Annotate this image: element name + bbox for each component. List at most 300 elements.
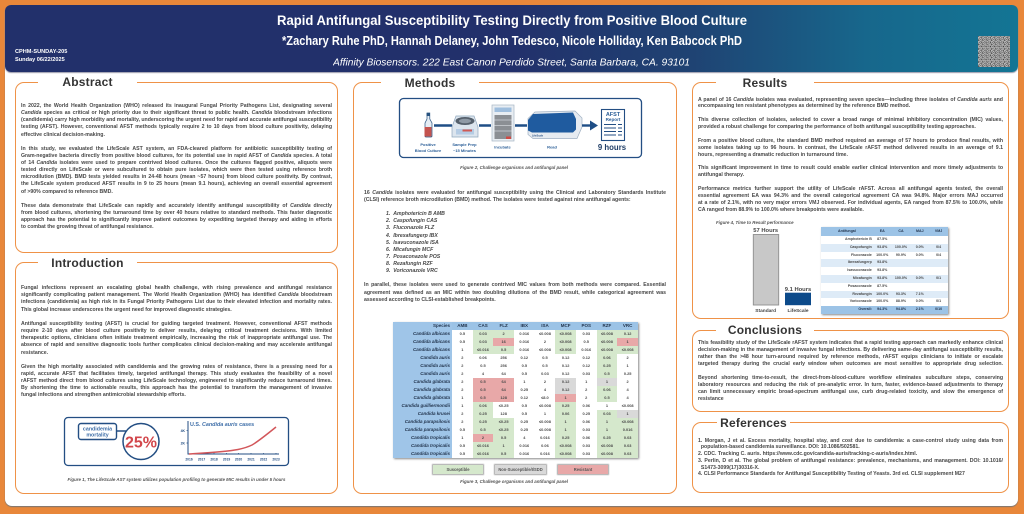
table: MIC results by species: 4 [482, 371, 484, 376]
table: performance by antifungal: Isavuconazole [847, 268, 872, 272]
legend: resistant: Resistant [574, 467, 592, 472]
line chart: U.S. Candida auris cases: 2018 [210, 458, 218, 462]
list: antifungal agents [386, 211, 445, 274]
poster id and date: Sunday 06/22/2025 [15, 57, 65, 63]
table: performance by antifungal: 0.0% [916, 276, 924, 280]
table: MIC results by species: 0.06 [603, 355, 611, 360]
icon: blood culture bottle [424, 113, 432, 137]
table: MIC results by species: ≤0.008 [601, 331, 613, 336]
text: methods intro [364, 190, 666, 203]
table: MIC results by species: Candida auris [420, 371, 450, 376]
table: MIC results by species: 0.25 [603, 435, 611, 440]
table: MIC results by species: Candida glabrata [413, 387, 450, 392]
table: MIC results by species: ≤0.008 [560, 451, 572, 456]
text: results body: Performance metrics further support the utility of LifeScale rAFST. Across all antifungal agents tested, the overall [698, 186, 1003, 192]
legend: non-susceptible [495, 465, 546, 474]
table: MIC results by species: 0.03 [479, 339, 487, 344]
table: performance by antifungal: Antifungal [838, 229, 856, 233]
text: conclusions body: targeted therapy during the crucial early window when outcomes are most sensitive to appropriate drug selection. [698, 361, 1003, 367]
heading: methods [381, 76, 479, 90]
icon: LifeScale reader [528, 111, 582, 138]
table: performance by antifungal [821, 227, 948, 314]
table: MIC results by species: 2 [461, 363, 463, 368]
table: MIC results by species: ≤0.25 [499, 427, 508, 432]
table: MIC results by species: 0.25 [520, 387, 528, 392]
table: MIC results by species: 0.5 [522, 371, 527, 376]
heading: methods: Methods [405, 76, 455, 90]
table: MIC results by species: 0.016 [519, 331, 529, 336]
panel: methods [353, 82, 677, 494]
table: MIC results by species: 0.12 [562, 379, 569, 384]
text: conclusions body [698, 340, 1003, 402]
table: MIC results by species: 0.5 [460, 443, 465, 448]
table: MIC results by species: 1 [606, 379, 608, 384]
table: MIC results by species: MCF [561, 323, 570, 328]
text: methods parallel testing: In parallel, these isolates were used to generate contrived MIC values from both methods were compared. Essential [364, 282, 666, 288]
table: MIC results by species: 128 [500, 395, 507, 400]
text: introduction body [21, 285, 332, 398]
text: abstract body: These data demonstrate that LifeScale can rapidly and accurately identify antifungal susceptibility of Candida directly [21, 203, 332, 209]
table: MIC results by species: ≤0.008 [539, 419, 551, 424]
table: MIC results by species: 2 [461, 355, 463, 360]
bar: standard 57 hours: Standard [755, 308, 776, 314]
workflow labels: ~15 Minutes [453, 148, 477, 153]
table: MIC results by species: VRC [623, 323, 632, 328]
table: performance by antifungal: Posaconazole [848, 284, 872, 288]
table: MIC results by species: 0.12 [562, 355, 569, 360]
table: MIC results by species: 0.016 [581, 347, 591, 352]
line chart: U.S. Candida auris cases: 2019 [223, 458, 230, 462]
table: MIC results by species: ≤0.008 [601, 339, 613, 344]
text: introduction body: rapid, accurate AFST that facilitates timely, targeted antifungal therapy. This study evaluates the feasibility of a novel [21, 371, 332, 377]
icon: centrifuge [452, 116, 478, 137]
table: MIC results by species: 0.03 [624, 443, 631, 448]
table: MIC results by species: 1 [606, 427, 608, 432]
table: MIC results by species: 0.25 [582, 411, 590, 416]
text: abstract body: effective clinical decision-making. [21, 132, 105, 138]
table: performance by antifungal: 0/4 [936, 245, 941, 249]
table: MIC results by species: ≤0.008 [622, 347, 634, 352]
table: performance by antifungal: Micafungin [853, 276, 872, 280]
table: MIC results by species: 0.12 [562, 387, 569, 392]
table: MIC results by species: 0.06 [562, 411, 569, 416]
table: MIC results by species: 0.25 [562, 403, 569, 408]
line chart: U.S. Candida auris cases: 2016 [185, 458, 193, 462]
text: introduction body: This global increase underscores the urgent need for improved diagnostic strategies. [21, 307, 232, 313]
table: MIC results by species: ≤8.0 [541, 395, 549, 400]
callout: candidemia mortality: candidemia [83, 426, 112, 432]
line chart: U.S. Candida auris cases: 2K [181, 441, 186, 445]
table: MIC results by species: ≤0.008 [560, 347, 572, 352]
table: MIC results by species: 0.25 [520, 427, 528, 432]
caption: figure 1: Figure 1, The LifeScale AST system utilizes population profiling to generate MIC results in under 5 hours [68, 477, 285, 482]
table: MIC results by species: 0.06 [582, 419, 590, 424]
text: introduction body: require 2-10 days after blood culture positivity to deliver results, delaying critical treatment decisions. With limited [21, 328, 332, 334]
table: MIC results by species: 0.016 [519, 339, 529, 344]
table: MIC results by species: 0.03 [624, 451, 631, 456]
table: performance by antifungal: Caspofungin [850, 245, 872, 249]
list: antifungal agents: 8. Rezafungin RZF [386, 261, 433, 267]
text: introduction body: Fungal infections represent an escalating global health challenge, with rising prevalence and antifungal resistance [21, 285, 332, 291]
table: MIC results by species: 0.5 [460, 427, 465, 432]
bar: standard 57 hours: 57 Hours [753, 228, 778, 234]
line chart: U.S. Candida auris cases: 2021 [247, 458, 255, 462]
line chart: U.S. Candida auris cases: 2017 [198, 458, 205, 462]
table: MIC results by species: 64 [501, 379, 506, 384]
table: MIC results by species: 1 [627, 339, 629, 344]
table: performance by antifungal: 93.3% [896, 292, 906, 296]
table: performance by antifungal: 0.0% [916, 253, 924, 257]
text: abstract body: testing (AFST). However, conventional AFST methods typically require 2 to 10 days from blood culture positivity, delaying [21, 124, 332, 130]
figure 2: workflow diagram [398, 98, 642, 158]
table: MIC results by species: IBX [521, 323, 528, 328]
table: MIC results by species: 128 [500, 411, 507, 416]
heading: abstract [38, 75, 137, 89]
table: MIC results by species: 0.016 [519, 451, 529, 456]
table: MIC results by species: 1 [503, 443, 505, 448]
table: MIC results by species: ≤0.25 [499, 419, 508, 424]
workflow connectors [434, 124, 527, 127]
table: MIC results by species: 0.5 [522, 411, 527, 416]
table: MIC results by species: 0.03 [582, 443, 590, 448]
text: results body: at a rate of 2.1%, with no very major errors VMJ observed. For individual agents, EA ranged from 87.5% to 100.0%, while [698, 200, 1003, 206]
table: performance by antifungal: Ibrexafungerp [848, 260, 872, 264]
panel: references [692, 422, 1009, 493]
text: results body: antifungal therapy. [698, 172, 744, 178]
table: performance by antifungal: 0/4 [936, 253, 941, 257]
table: MIC results by species: Candida albicans [413, 347, 450, 352]
table: MIC results by species: 1 [565, 427, 567, 432]
list: antifungal agents: 3. Fluconazole FLZ [386, 225, 434, 231]
table: MIC results by species: 0.5 [460, 339, 465, 344]
icon: AFST report: AFST [606, 112, 621, 118]
table: MIC results by species: 0.03 [582, 427, 590, 432]
table: MIC results by species: Candida tropicalis [411, 435, 450, 440]
table: MIC results by species: 1 [565, 395, 567, 400]
table: MIC results by species: POS [582, 323, 591, 328]
table: MIC results by species: 0.25 [603, 363, 611, 368]
table: MIC results by species: 16 [501, 339, 506, 344]
table: MIC results by species: 0.25 [520, 419, 528, 424]
bar chart: time to result [752, 228, 811, 314]
table: MIC results by species: 1 [461, 403, 463, 408]
icon: LifeScale reader: LifeScale [532, 134, 544, 138]
text: results body: hours, representing a dramatic reduction in turnaround time. [698, 152, 848, 158]
line chart: U.S. Candida auris cases [181, 421, 280, 462]
heading: abstract: Abstract [62, 75, 113, 89]
text: results body: From a positive blood culture, the standard BMD method required an average of 57 hours to produce final results, with [698, 138, 1003, 144]
line chart: U.S. Candida auris cases: 2023 [272, 458, 280, 462]
bar: lifescale 9.1 hours: LifeScale [787, 308, 809, 314]
table: MIC results by species: 2 [461, 419, 463, 424]
table: performance by antifungal: 94.8% [896, 307, 906, 311]
label: 9 hours: 9 hours [598, 143, 627, 152]
icon: 25 percent circle: 25% [125, 434, 157, 452]
table: MIC results by species: Species [433, 323, 450, 328]
table: MIC results by species: 0.5 [604, 371, 610, 376]
text: results body [698, 97, 1003, 213]
table: MIC results by species: Candida glabrata [413, 379, 450, 384]
table: MIC results by species: Candida parapsilosis [405, 427, 450, 432]
affiliation: Affinity Biosensors. 222 East Canon Perdido Street, Santa Barbara, CA. 93101 [333, 56, 690, 68]
table: MIC results by species: FLZ [500, 323, 508, 328]
table: performance by antifungal: 87.5% [877, 237, 887, 241]
heading: references: References [720, 416, 787, 430]
table: MIC results by species: ≤0.008 [539, 427, 551, 432]
table: performance by antifungal: Overall: [858, 307, 872, 311]
table: performance by antifungal: 100.0% [876, 253, 888, 257]
table: MIC results by species: ≤0.008 [560, 331, 572, 336]
text: introduction body: infections (candidemia) as high risk in its Fungal Priority Pathogens List due to their elevated infection and mortality rates. [21, 299, 332, 305]
table: MIC results by species: AMB [457, 323, 467, 328]
text: conclusions body: laboratory resources and reducing the risk of pre-analytic error. In turn, faster, evidence-based adjustments to therapy [698, 382, 1003, 388]
text: references list: 4. CLSI Performance Standards for Antifungal Susceptibility Testing of Yeasts. 3rd ed. CLSI supplement M27 [698, 471, 965, 477]
line chart: U.S. Candida auris cases: U.S. Candida auris cases [190, 422, 254, 428]
text: references list: S1473-3099(17)30316-X. [701, 465, 759, 471]
table: performance by antifungal: 93.8% [877, 276, 887, 280]
text: abstract body: of >90% compared to reference BMD. [21, 189, 113, 195]
text: introduction body: resistance. [21, 350, 48, 356]
table: MIC results by species: ≤0.016 [477, 347, 489, 352]
table: MIC results by species: 2 [503, 331, 505, 336]
text: references list: 2. CDC. Tracking C. auris. https://www.cdc.gov/candida-auris/tracking-c-auris/index.html. [698, 451, 917, 457]
table: MIC results by species: 0.5 [480, 363, 486, 368]
text: results body: encompassing ten resistant phenotypes as determined by the reference BMD method. [698, 103, 910, 109]
text: introduction body: Antifungal susceptibility testing (AFST) is crucial for guiding targeted treatment. However, conventional AFST methods [21, 321, 332, 327]
text: methods parallel testing [364, 282, 666, 303]
table: MIC results by species: 0.12 [562, 371, 569, 376]
text: results body: This significant improvement in time to result could enable earlier clinical intervention and more timely adjustments to [698, 165, 1003, 171]
caption: figure 3: Figure 3, Challenge organisms and antifungal panel [460, 478, 568, 484]
table: MIC results by species: 0.03 [582, 331, 590, 336]
list: antifungal agents: 7. Posaconazole POS [386, 254, 440, 260]
table: performance by antifungal: 93.8% [877, 268, 887, 272]
icon: AFST report: Report [606, 117, 621, 122]
table: MIC results by species: 256 [500, 355, 507, 360]
table: MIC results by species: 0.03 [582, 371, 590, 376]
table: MIC results by species: 0.5 [480, 387, 486, 392]
text: methods intro: 16 Candida isolates were evaluated for antifungal susceptibility using the Clinical and Laboratory Standards Institute [364, 190, 666, 196]
table: MIC results by species: 0.03 [624, 435, 631, 440]
heading: introduction: Introduction [51, 256, 124, 270]
table: MIC results by species: ≤0.016 [477, 451, 489, 456]
table: MIC results by species: 0.06 [479, 403, 487, 408]
table: MIC results by species: ≤0.008 [560, 443, 572, 448]
table: MIC results by species: 0.12 [624, 331, 631, 336]
table: performance by antifungal: 0.0% [916, 299, 924, 303]
icon: incubator [492, 105, 514, 141]
table: performance by antifungal: 90.9% [896, 253, 906, 257]
table: MIC results by species: 1 [606, 419, 608, 424]
icon: 25 percent circle [123, 424, 159, 460]
text: abstract body: approach has the potential to significantly improve patient outcomes by expediting targeted therapy and aiding in efforts [21, 217, 332, 223]
workflow labels: Sample Prep [452, 142, 477, 147]
table: MIC results by species: 0.03 [582, 451, 590, 456]
text: abstract body: Candida species as critical or high priority due to their significant threat to public health. Candida bloodstream infections [21, 110, 332, 116]
text: results body: CA ranged from 88.9% to 100.0% where breakpoints were available. [698, 207, 864, 213]
text: conclusions body: This feasibility study of the LifeScale rAFST system indicates that a rapid testing approach can markedly enhance clinical [698, 340, 1003, 346]
table: MIC results by species: CAS [478, 323, 488, 328]
table: MIC results by species: 0.12 [520, 395, 528, 400]
text: results body: some isolates taking up to 96 hours. In contrast, the LifeScale rAFST method delivered results in an average of 9.1 [698, 145, 1003, 151]
table: MIC results by species: ≤0.016 [477, 443, 489, 448]
callout: candidemia mortality [78, 424, 126, 440]
table: performance by antifungal: EA [880, 229, 885, 233]
table: performance by antifungal: 100.0% [895, 245, 907, 249]
text: methods parallel testing: agreement was defined as an MIC within two doubling dilutions of the BMD result, while categorical agreement was [364, 290, 666, 296]
text: conclusions body: decision-making in the management of invasive fungal infections. By delivering same-day antifungal susceptibility results, [698, 347, 1003, 353]
list: antifungal agents: 4. Ibrexafungerp IBX [386, 233, 438, 239]
figure 1: mortality and auris cases [64, 416, 290, 466]
heading: conclusions: Conclusions [728, 323, 802, 337]
table: MIC results by species: 4 [627, 395, 629, 400]
table: MIC results by species: 0.016 [623, 427, 632, 432]
text: abstract body: In this study, we evaluated the LifeScale AST system, an FDA-cleared platform for antibiotic susceptibility testing of [21, 146, 332, 152]
list: antifungal agents: 6. Micafungin MCF [386, 247, 433, 253]
legend: susceptible [433, 465, 483, 474]
workflow labels: Blood Culture [415, 148, 442, 153]
table: MIC results by species: 0.12 [582, 355, 590, 360]
table: MIC results by species: Candida tropicalis [411, 451, 450, 456]
table: MIC results by species: 0.5 [480, 395, 486, 400]
text: methods intro: (CLSI) reference broth microdilution (BMD) method. The isolates were tested against nine antifungal agents: [364, 197, 631, 203]
table: performance by antifungal: 100.0% [876, 292, 888, 296]
table: MIC results by species: 0.5 [480, 379, 486, 384]
table: MIC results by species: 1 [606, 403, 608, 408]
table: performance by antifungal: 2.1% [916, 307, 924, 311]
table: MIC results by species: 0.016 [519, 347, 529, 352]
table: MIC results by species: ≤0.008 [601, 451, 613, 456]
table: MIC results by species: 0.5 [542, 355, 548, 360]
table: performance by antifungal: 100.0% [895, 276, 907, 280]
table: performance by antifungal: VMJ [935, 229, 942, 233]
arrow [582, 124, 593, 127]
table: MIC results by species: 2 [461, 387, 463, 392]
figure frame [64, 418, 288, 466]
table: MIC results by species: 0.06 [582, 435, 590, 440]
table: MIC results by species: 2 [585, 395, 587, 400]
table: MIC results by species: 2 [544, 339, 546, 344]
table: performance by antifungal: 0/1 [936, 299, 941, 303]
table: MIC results by species: 2 [627, 355, 629, 360]
table: MIC results by species: 0.5 [501, 347, 506, 352]
legend: resistant [558, 465, 608, 474]
table: MIC results by species: 0.06 [603, 387, 611, 392]
table: MIC results by species: Candida glabrata [413, 395, 450, 400]
text: abstract body: In 2022, the World Health Organization (WHO) released its inaugural Fungal Priority Pathogens List, designating several [21, 103, 332, 109]
list: antifungal agents: 9. Voriconazole VRC [386, 268, 438, 274]
table: MIC results by species: 2 [461, 379, 463, 384]
table: MIC results by species: Candida krusei [418, 411, 450, 416]
table: performance by antifungal: 88.9% [896, 299, 906, 303]
table: MIC results by species: 0.5 [522, 363, 527, 368]
text: abstract body: Gram-negative bacteria directly from positive blood cultures, for its potential use in rapid AFST of Candida species. A total [21, 153, 332, 159]
table: MIC results by species: 0.016 [519, 443, 529, 448]
panel: abstract [15, 82, 338, 253]
table: performance by antifungal: 94.3% [877, 307, 887, 311]
text: abstract body: the LifeScale system produced AFST results in 9 to 25 hours (mean 9.1 hours), achieving an overall essential agreement [21, 181, 332, 187]
table: MIC results by species: Candida albicans [413, 331, 450, 336]
table: MIC results by species: 1 [627, 363, 629, 368]
icon: QR code [978, 36, 1010, 67]
table: performance by antifungal: CA [898, 229, 904, 233]
table: MIC results by species: 0.25 [479, 411, 487, 416]
table: performance by antifungal: Voriconazole [850, 299, 872, 303]
table: MIC results by species: ≤0.008 [539, 331, 551, 336]
text: introduction body: absence of rapid and sensitive diagnostic tools further complicates clinical decision-making and may accelerate antifungal [21, 342, 332, 348]
table: MIC results by species: 64 [501, 371, 506, 376]
table: MIC results by species: 2 [544, 379, 546, 384]
text: introduction body: fungal infections and strengthen antimicrobial stewardship efforts. [21, 392, 186, 398]
bar: lifescale 9.1 hours: 9.1 Hours [785, 287, 811, 293]
list: antifungal agents: 2. Caspofungin CAS [386, 218, 437, 224]
table: MIC results by species: 4 [627, 387, 629, 392]
table: MIC results by species: 0.03 [541, 371, 549, 376]
table: MIC results by species: 1 [565, 419, 567, 424]
table: MIC results by species: Candida auris [420, 355, 450, 360]
table: MIC results by species: ≤0.008 [601, 443, 613, 448]
table: MIC results by species: ≤0.008 [560, 339, 572, 344]
table: performance by antifungal: 0/1 [936, 276, 941, 280]
text: references list: 1. Morgan, J et al. Excess mortality, hospital stay, and cost due to candidemia: a case-control study using data from [698, 438, 1003, 444]
table: MIC results by species: ≤0.008 [622, 419, 634, 424]
table: performance by antifungal: 0.0% [916, 245, 924, 249]
table: MIC results by species: ≤0.008 [622, 403, 634, 408]
table: MIC results by species: 0.5 [501, 451, 506, 456]
table: MIC results by species: 0.03 [603, 411, 611, 416]
text: abstract body: to combat the growing threat of antifungal resistance. [21, 224, 154, 230]
list: antifungal agents: 1. Amphotericin B AMB [386, 211, 445, 217]
table: MIC results by species: Candida tropicalis [411, 443, 450, 448]
table: MIC results by species: ≤0.008 [539, 347, 551, 352]
table: MIC results by species: 1 [544, 411, 546, 416]
text: introduction body: rAFST method direct from blood cultures using LifeScale technology, engineered to significantly reduce turnaround times. [21, 378, 332, 384]
table: performance by antifungal: 93.8% [877, 245, 887, 249]
table: MIC results by species: RZF [603, 323, 611, 328]
table: MIC results by species: 0.06 [541, 443, 549, 448]
table: MIC results by species: 0.25 [562, 435, 569, 440]
table: MIC results by species: 0.5 [460, 331, 465, 336]
text: references list: 3. Perlin, D et al. The global problem of antifungal resistance: prevalence, mechanisms, and management. DOI: 10.1016/ [698, 458, 1003, 464]
table: MIC results by species: 0.5 [501, 435, 506, 440]
line chart: U.S. Candida auris cases: 2022 [260, 458, 267, 462]
text: references list [698, 438, 1003, 477]
table: MIC results by species: 4 [544, 387, 546, 392]
icon: AFST report [602, 110, 624, 140]
table: MIC results by species: 0.03 [479, 331, 487, 336]
table: MIC results by species: 0.5 [542, 363, 548, 368]
text: methods parallel testing: assessed according to CLSI-established breakpoints. [364, 297, 496, 303]
table: MIC results by species: ISA [541, 323, 549, 328]
heading: results [716, 76, 814, 90]
bar: standard 57 hours [753, 228, 779, 314]
bar: lifescale 9.1 hours [785, 287, 811, 314]
table: performance by antifungal: Fluconazole [851, 253, 872, 257]
list: antifungal agents: 5. Isavuconazole ISA [386, 240, 439, 246]
table: performance by antifungal: 100.0% [876, 299, 888, 303]
table: MIC results by species: 1 [461, 395, 463, 400]
table: MIC results by species: 0.12 [562, 363, 569, 368]
table: performance by antifungal: 87.5% [877, 284, 887, 288]
table: MIC results by species: 4 [523, 435, 525, 440]
text: introduction body: therapeutic options, clinicians often initiate treatment empirically, increasing the risk of inappropriate antifungal use. The [21, 335, 332, 341]
workflow labels [415, 142, 557, 153]
table: performance by antifungal: Amphotericin B [845, 237, 872, 241]
caption: figure 4: Figure 4, Time to Result performance [716, 220, 794, 225]
text: abstract body: (candidemia) carry high morbidity and mortality, underscoring the urgent need for rapid and accurate antifungal susceptibility [21, 117, 332, 123]
workflow labels: Read [547, 144, 557, 150]
panel: results [692, 82, 1009, 319]
